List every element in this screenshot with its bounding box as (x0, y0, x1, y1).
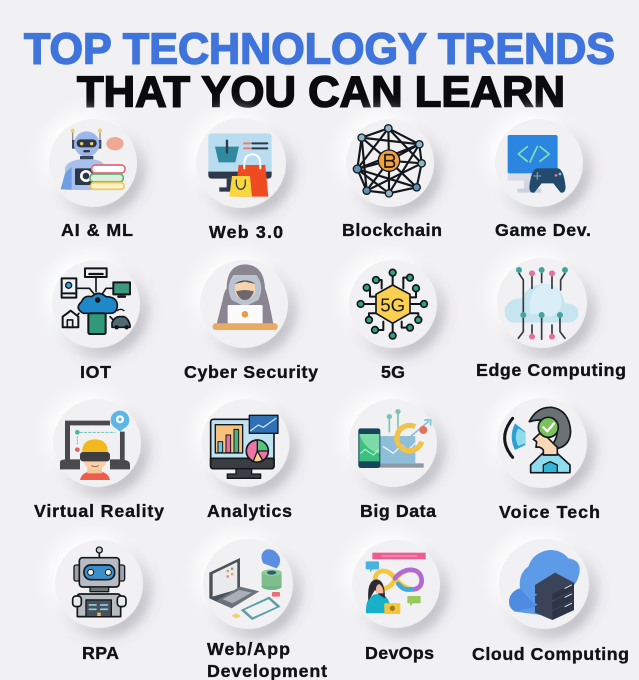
label: RPA (82, 643, 119, 663)
icon: blockchain network (353, 125, 425, 197)
label: Web 3.0 (209, 222, 283, 242)
label: Blockchain (342, 220, 442, 240)
icon: online shop monitor and bags (208, 133, 272, 197)
icon: voice recognition head (505, 407, 571, 473)
panel: IOT (52, 260, 140, 382)
label: 5G (381, 362, 405, 382)
panel: Cloud Computing (472, 539, 629, 664)
label: Cyber Security (184, 362, 318, 382)
panel: AI & ML (49, 119, 137, 240)
icon: laptop with tablet and cloud (209, 549, 282, 620)
title: THAT YOU CAN LEARN (77, 67, 565, 116)
label: AI & ML (61, 220, 133, 240)
label: Virtual Reality (34, 501, 164, 521)
panel: DevOps (352, 540, 440, 663)
label: IOT (80, 362, 111, 382)
icon: edge cloud with circuit pins (505, 267, 578, 340)
panel: Game Dev. (495, 119, 591, 240)
icon: DevOps infinity loop and person (366, 553, 426, 614)
panel: Big Data (349, 399, 437, 521)
panel: Analytics (202, 399, 292, 521)
panel: RPA (55, 540, 143, 663)
panel: Web 3.0 (196, 118, 286, 242)
icon: internet of things cloud (62, 268, 130, 334)
label: Voice Tech (499, 502, 600, 522)
icon: big data devices and target (358, 409, 431, 468)
label: DevOps (365, 643, 434, 663)
panel: Cyber Security (184, 260, 318, 382)
panel: Virtual Reality (34, 399, 164, 521)
label: Analytics (207, 501, 292, 521)
label: Game Dev. (495, 220, 591, 240)
label: Big Data (360, 501, 436, 521)
panel: Voice Tech (497, 398, 600, 522)
icon: hooded hacker with laptop (213, 264, 278, 330)
label: Web/App (207, 639, 290, 659)
label: Cloud Computing (472, 644, 629, 664)
icon: 5G chip: 5G (380, 295, 405, 316)
panel: Edge Computing (476, 258, 626, 380)
icon: VR headset user (60, 411, 130, 480)
icon: cloud and server stack (509, 550, 580, 620)
icon: robot (73, 547, 126, 617)
title (24, 25, 615, 116)
panel: 5G (349, 260, 437, 382)
label: Edge Computing (476, 360, 626, 380)
panel: Web/App Development (203, 539, 327, 680)
icon: monitor and game controller (508, 135, 566, 193)
icon: analytics monitor (211, 415, 278, 478)
icon: AI robot with books (61, 129, 125, 190)
label (207, 639, 327, 680)
panel: Blockchain (342, 119, 442, 240)
title: TOP TECHNOLOGY TRENDS (24, 25, 615, 74)
